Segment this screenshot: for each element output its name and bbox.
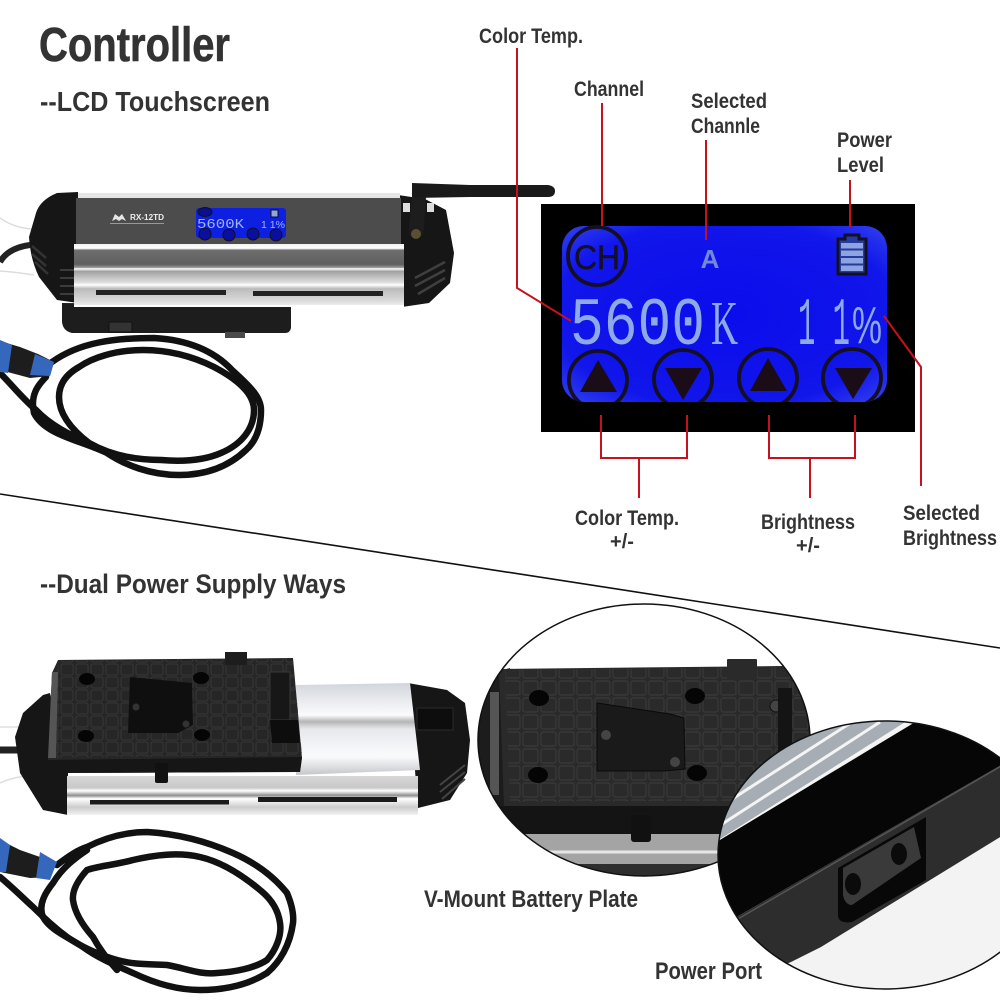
silver rail xyxy=(525,834,720,864)
heading: LCD touchscreen: --LCD Touchscreen xyxy=(40,86,270,117)
white wires xyxy=(0,727,26,783)
photo: light panel controller front xyxy=(0,183,555,475)
heading: dual power supply: --Dual Power Supply Ways xyxy=(40,569,346,599)
switches xyxy=(403,203,410,212)
top tab xyxy=(225,652,247,665)
tab xyxy=(727,659,757,679)
mounting holes xyxy=(79,673,95,685)
label: selected channel xyxy=(691,90,767,138)
title: Controller xyxy=(39,19,230,72)
lower pin xyxy=(155,763,168,783)
dark grey side xyxy=(738,766,1000,964)
label: brightness plus minus xyxy=(761,511,855,557)
screw xyxy=(770,700,778,712)
label: brightness plus minus: Brightness xyxy=(761,511,855,534)
kelvin unit: K xyxy=(711,290,738,358)
zoom circle: power port xyxy=(717,720,1000,990)
antenna xyxy=(409,183,555,239)
label: power level: Level xyxy=(837,154,884,177)
selected channel letter: A xyxy=(701,244,720,274)
section divider line xyxy=(0,494,1000,648)
V-lock xyxy=(597,703,685,771)
blue connector xyxy=(0,840,50,878)
button: colour temp up xyxy=(569,351,627,409)
callout leader lines xyxy=(517,48,921,498)
brand label xyxy=(110,213,164,224)
dark control panel xyxy=(76,198,401,245)
label: selected channel: Selected xyxy=(691,90,767,113)
V-mount plate xyxy=(48,658,302,773)
photo: light panel controller back with V-mount plate xyxy=(0,652,470,990)
touch buttons xyxy=(569,349,881,409)
right end cap xyxy=(408,683,470,808)
small LCD screen xyxy=(196,208,286,241)
left end cap xyxy=(29,192,78,303)
silver rail stripes xyxy=(720,722,904,839)
vent slots xyxy=(96,290,226,295)
label: color temp plus minus xyxy=(575,507,679,553)
power cable coil xyxy=(0,338,261,475)
icon: channel badge xyxy=(568,227,626,285)
power lead xyxy=(0,746,18,754)
label: selected brightness xyxy=(903,502,997,550)
aluminium upper face xyxy=(296,683,420,775)
colour temperature readout: 5600 xyxy=(570,288,705,365)
plate body xyxy=(499,666,820,806)
power cable coil xyxy=(0,832,293,990)
label: selected channel: Channle xyxy=(691,115,760,138)
label: color temp plus minus: Color Temp. xyxy=(575,507,679,530)
small LCD screen: 5600K xyxy=(197,217,245,233)
black band xyxy=(718,724,1000,916)
label: power level: Power xyxy=(837,129,892,152)
pin xyxy=(631,834,651,842)
button: brightness down xyxy=(823,349,881,407)
right end cap xyxy=(398,195,454,307)
icon: battery level xyxy=(838,235,866,274)
holes xyxy=(529,690,549,706)
white wires xyxy=(0,218,34,275)
label: brightness plus minus: +/- xyxy=(796,535,820,557)
label: color temp top: Color Temp. xyxy=(479,25,583,48)
aluminium lower bar xyxy=(67,776,418,815)
label: channel: Channel xyxy=(574,78,644,101)
V-lock xyxy=(128,677,193,733)
percent sign: % xyxy=(852,297,882,355)
label: selected brightness: Selected xyxy=(903,502,980,525)
left end cap xyxy=(15,693,68,815)
end cap behind plate xyxy=(478,668,510,806)
label: color temp plus minus: +/- xyxy=(610,531,634,553)
label: power level xyxy=(837,129,892,177)
LCD close-up panel: 1 1 xyxy=(798,288,850,365)
vent slots xyxy=(90,800,229,804)
plate underside xyxy=(510,806,729,834)
plate side ridges xyxy=(490,692,499,795)
zoom circle: V-mount battery plate xyxy=(470,604,820,878)
backlit blue display xyxy=(562,226,887,402)
right connector xyxy=(270,672,290,720)
button: brightness up xyxy=(739,349,797,407)
small LCD screen: 1 1% xyxy=(261,220,285,231)
button: colour temp down xyxy=(654,350,712,408)
mounting plate xyxy=(62,303,291,333)
aluminium body xyxy=(74,244,404,306)
LCD close-up panel xyxy=(541,204,915,432)
brand label: RX-12TD xyxy=(130,213,164,222)
aluminium top edge xyxy=(78,193,400,199)
label: V-mount battery plate: V-Mount Battery Plate xyxy=(424,886,638,913)
power lead xyxy=(0,245,30,262)
blue connector xyxy=(0,341,54,378)
label: power port: Power Port xyxy=(655,958,762,985)
icon: channel badge: CH xyxy=(574,239,620,277)
power port socket xyxy=(838,817,926,922)
